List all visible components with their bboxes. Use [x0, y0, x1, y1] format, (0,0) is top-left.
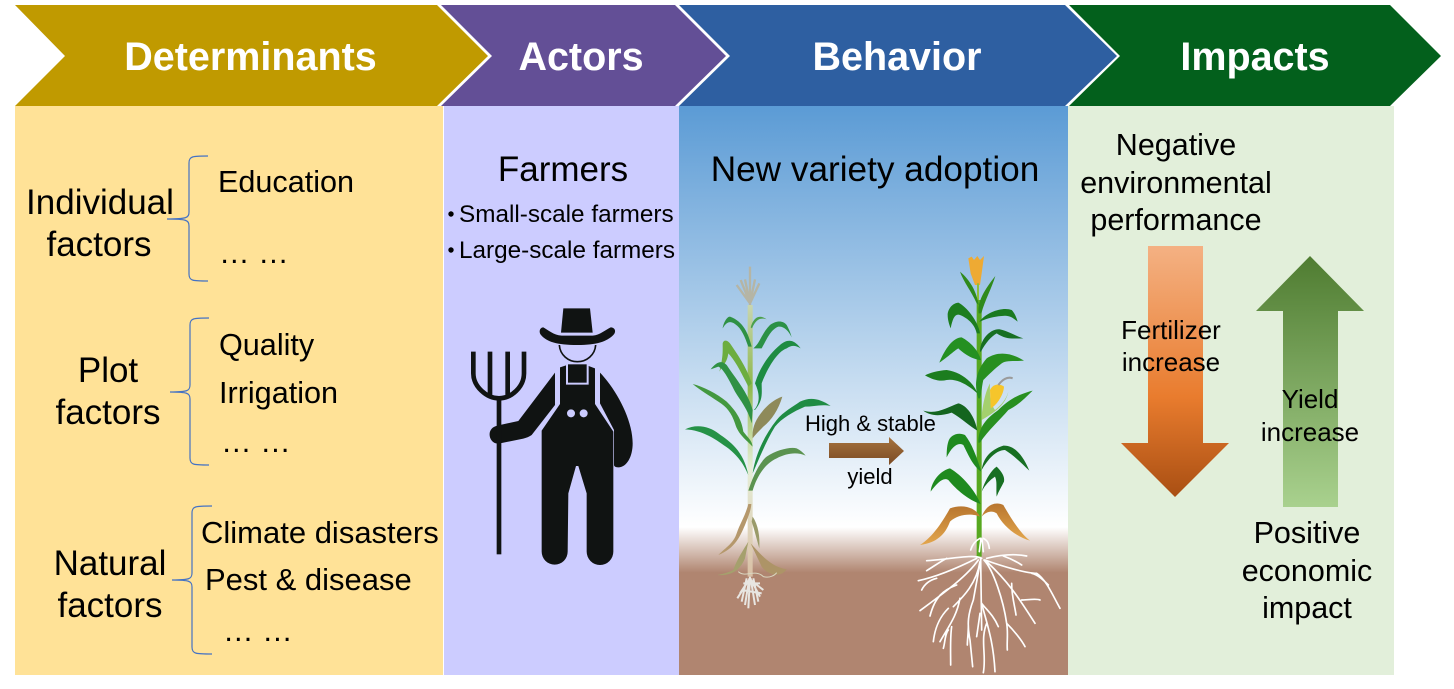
- arrow: yield increase: [1256, 256, 1364, 507]
- item: ellipsis: … …: [221, 425, 291, 459]
- heading: new variety adoption: New variety adoption: [711, 150, 1039, 189]
- label: natural factors: factors: [57, 586, 163, 625]
- item: education: Education: [218, 165, 354, 199]
- arrow: fertilizer increase: increase: [1122, 347, 1220, 377]
- text: positive economic impact: economic: [1242, 554, 1372, 588]
- panel: impacts background: [1068, 106, 1394, 675]
- item: ellipsis: … …: [223, 614, 293, 648]
- panel: behavior background: [679, 106, 1068, 675]
- item: quality: Quality: [219, 328, 315, 362]
- icon: farmer with pitchfork: [473, 308, 633, 565]
- arrow: fertilizer increase: Fertilizer: [1121, 315, 1221, 345]
- label: plot factors: factors: [55, 393, 161, 432]
- heading: farmers: Farmers: [498, 150, 628, 189]
- group: natural factors: [54, 506, 439, 654]
- text: negative environmental performance: environmental: [1080, 166, 1272, 200]
- item: pest and disease: Pest & disease: [205, 562, 412, 597]
- label: individual factors: Individual: [26, 183, 174, 222]
- header chevron: Determinants: [15, 5, 488, 106]
- arrow: yield improvement: [829, 437, 904, 465]
- header chevron: Impacts: Impacts: [1180, 35, 1330, 79]
- label: plot factors: Plot: [78, 351, 138, 390]
- list: farmer types: Large-scale farmers: [459, 237, 675, 264]
- text: positive economic impact: impact: [1262, 591, 1352, 625]
- label: high and stable yield: [805, 411, 936, 489]
- text: negative environmental performance: Negative: [1116, 128, 1236, 162]
- text: negative environmental performance: performance: [1090, 203, 1262, 237]
- brace: natural factors: [172, 506, 212, 654]
- brace: individual factors: [167, 156, 208, 281]
- list: farmer types: [448, 201, 675, 264]
- label: natural factors: Natural: [54, 544, 166, 583]
- illustration: new maize plant: [918, 256, 1060, 673]
- panel: determinants background: [15, 106, 443, 675]
- label: high and stable yield: yield: [847, 464, 893, 489]
- header chevron: Behavior: [679, 5, 1117, 106]
- panel: actors background: [444, 106, 679, 675]
- brace: plot factors: [170, 318, 209, 465]
- item: irrigation: Irrigation: [219, 376, 338, 410]
- list: farmer types: Small-scale farmers: [459, 201, 674, 228]
- text: positive economic impact: Positive: [1254, 516, 1360, 550]
- header chevron: Impacts: [1069, 5, 1441, 106]
- arrow: fertilizer increase: [1121, 246, 1229, 497]
- header chevron: Determinants: Determinants: [124, 35, 377, 79]
- header chevron: Actors: [441, 5, 726, 106]
- label: individual factors: factors: [46, 225, 152, 264]
- group: plot factors: [55, 318, 338, 465]
- group: individual factors: [26, 156, 354, 281]
- label: high and stable yield: High & stable: [805, 411, 936, 436]
- item: ellipsis: … …: [219, 236, 289, 270]
- header chevron: Behavior: Behavior: [812, 35, 982, 79]
- arrow: yield increase: Yield: [1282, 384, 1338, 414]
- header chevron: Actors: Actors: [518, 35, 644, 79]
- arrow: yield increase: increase: [1261, 417, 1359, 447]
- illustration: old maize plant: [685, 267, 831, 608]
- item: climate disasters: Climate disasters: [201, 515, 439, 550]
